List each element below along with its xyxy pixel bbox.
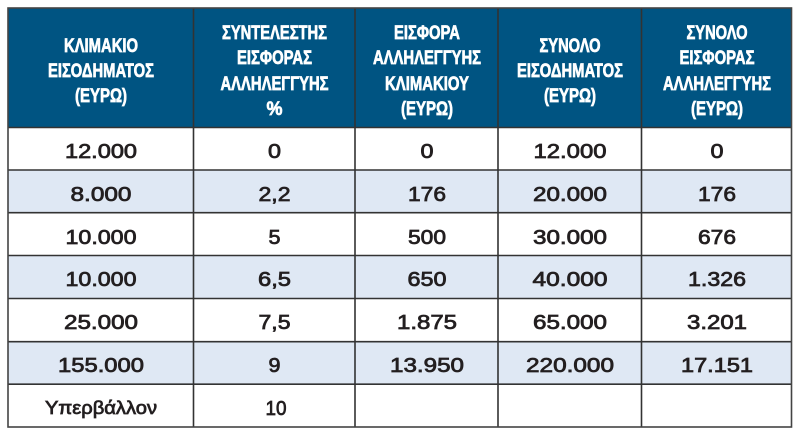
row 5: 1.875: [397, 312, 457, 334]
row 1: 12.000: [65, 141, 137, 163]
header: total income: (ΕΥΡΩ): [544, 86, 596, 107]
data rows: [45, 141, 753, 420]
row 6: 155.000: [58, 355, 144, 377]
header background: [8, 8, 792, 128]
header: income bracket: (ΕΥΡΩ): [75, 86, 127, 107]
header: total contribution: ΕΙΣΦΟΡΑΣ: [680, 48, 754, 69]
row 6: 220.000: [526, 355, 614, 377]
row 5: 25.000: [64, 312, 138, 334]
row 6: 13.950: [390, 355, 464, 377]
header: total income: ΕΙΣΟΔΗΜΑΤΟΣ: [517, 61, 623, 82]
header: contribution rate: ΑΛΛΗΛΕΓΓΥΗΣ: [220, 74, 328, 95]
header: contribution rate: ΕΙΣΦΟΡΑΣ: [237, 48, 312, 69]
row 4: 1.326: [688, 269, 746, 291]
header: income bracket: ΚΛΙΜΑΚΙΟ: [64, 36, 138, 57]
row 2: 176: [698, 184, 736, 206]
row 1: 0: [420, 141, 434, 163]
row 2: 2,2: [258, 184, 290, 206]
row 6: [58, 355, 753, 377]
row 1: 0: [710, 141, 724, 163]
header: total contribution: [663, 23, 771, 120]
row 7: [45, 398, 286, 420]
header: total income: ΣΥΝΟΛΟ: [540, 36, 600, 57]
header: bracket contribution: [373, 23, 481, 120]
header: bracket contribution: (ΕΥΡΩ): [401, 99, 453, 120]
header: income bracket: [48, 36, 154, 107]
row 3: 5: [268, 227, 280, 249]
header: bracket contribution: ΚΛΙΜΑΚΙΟΥ: [385, 74, 469, 95]
row 7: Υπερβάλλον: [45, 398, 157, 418]
row 4: 10.000: [66, 269, 136, 291]
row 1: [65, 141, 724, 163]
row 3: 10.000: [66, 227, 136, 249]
header: contribution rate: ΣΥΝΤΕΛΕΣΤΗΣ: [222, 23, 327, 44]
header: contribution rate: [220, 23, 328, 120]
header row: [48, 23, 771, 120]
header: total contribution: ΑΛΛΗΛΕΓΓΥΗΣ: [663, 74, 771, 95]
row 2: 8.000: [70, 184, 132, 206]
row 1: 12.000: [534, 141, 606, 163]
row 3: 30.000: [533, 227, 607, 249]
row 4: 6,5: [258, 269, 291, 291]
row 6: 17.151: [681, 355, 753, 377]
header: total contribution: (ΕΥΡΩ): [691, 99, 743, 120]
header: income bracket: ΕΙΣΟΔΗΜΑΤΟΣ: [48, 61, 154, 82]
header: bracket contribution: ΑΛΛΗΛΕΓΓΥΗΣ: [373, 48, 481, 69]
row 4: 40.000: [532, 269, 608, 291]
row 3: [66, 227, 736, 249]
header: total contribution: ΣΥΝΟΛΟ: [686, 23, 748, 44]
row 2: [70, 184, 736, 206]
row 2: 20.000: [533, 184, 607, 206]
header: total income: [517, 36, 623, 107]
row 6: 9: [268, 355, 280, 377]
row 4: [66, 269, 746, 291]
row 1: 0: [268, 141, 281, 163]
row 5: 65.000: [533, 312, 607, 334]
row 5: 3.201: [687, 312, 747, 334]
row 5: [64, 312, 747, 334]
row 4: 650: [408, 269, 446, 291]
alternating row shading: [8, 170, 792, 384]
row 3: 676: [698, 227, 736, 249]
row 5: 7,5: [258, 312, 290, 334]
header: bracket contribution: ΕΙΣΦΟΡΑ: [394, 23, 460, 44]
header: contribution rate: %: [266, 99, 283, 120]
row 7: 10: [266, 398, 286, 420]
row 2: 176: [408, 184, 446, 206]
row 3: 500: [408, 227, 446, 249]
